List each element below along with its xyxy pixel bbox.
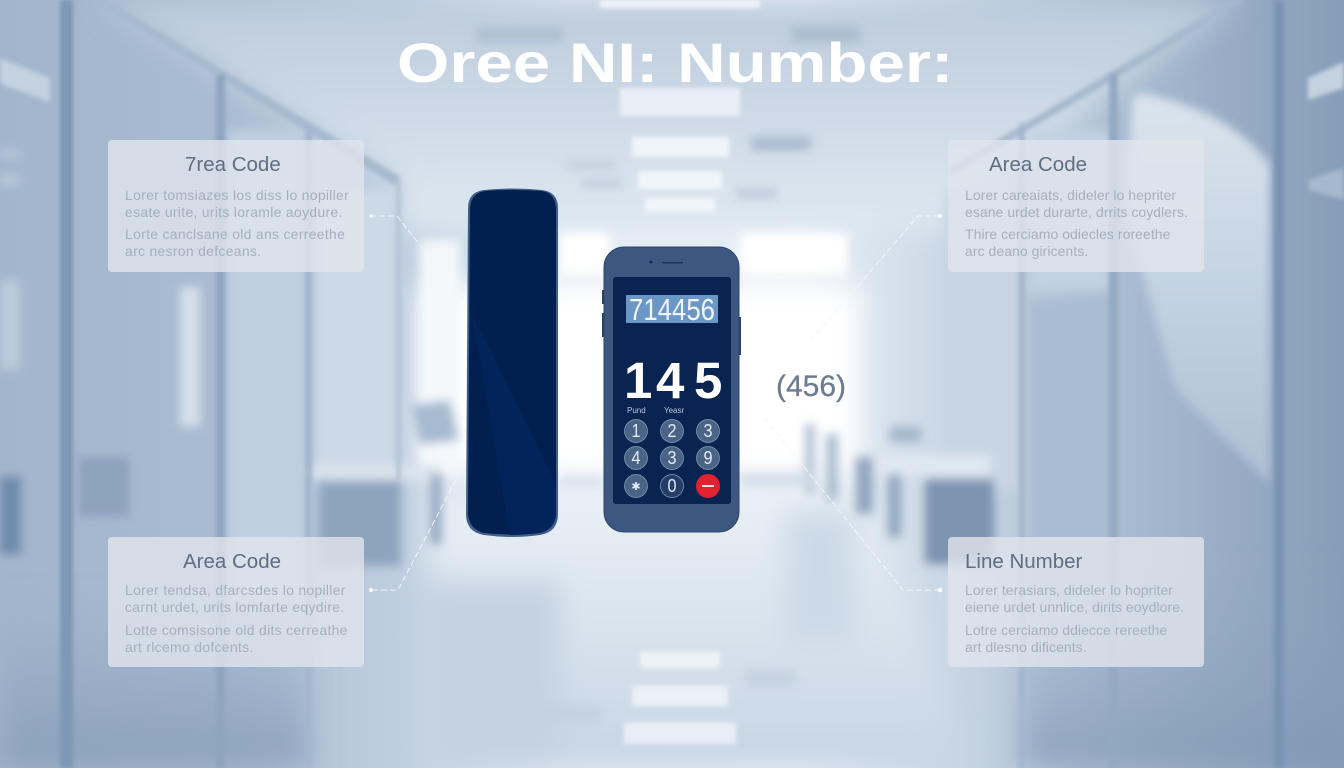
body text xyxy=(965,226,1170,259)
icon: smartphone: 9 xyxy=(704,448,712,468)
connector: bottom-right xyxy=(764,417,942,592)
icon: smartphone: 3 xyxy=(704,421,712,441)
heading: Line Number xyxy=(965,550,1082,573)
body text: esate urite, urits loramle aoydure. xyxy=(125,204,343,220)
connector: top-left xyxy=(370,214,466,303)
connector: top-right xyxy=(811,214,942,340)
body text: Lotte comsisone old dits cerreathe xyxy=(125,622,348,638)
body text: esane urdet durarte, drrits coydlers. xyxy=(965,204,1188,220)
panel: top-right area code xyxy=(948,140,1204,272)
body text xyxy=(125,582,346,615)
icon: smartphone: 5 xyxy=(694,352,722,409)
icon: smartphone: 0 xyxy=(668,476,676,496)
icon: smartphone: 714456 xyxy=(629,292,715,327)
heading: 7rea Code xyxy=(185,153,281,176)
icon: smartphone: 2 xyxy=(668,421,676,441)
icon: smartphone: Yeasr xyxy=(664,406,684,415)
heading: Area Code xyxy=(183,550,281,573)
body text: Lorer terasiars, dideler lo hopriter xyxy=(965,582,1173,598)
body text xyxy=(125,226,345,259)
body text xyxy=(965,582,1184,615)
icon: smartphone: 4 xyxy=(656,352,685,409)
body text: Lorte canclsane old ans cerreethe xyxy=(125,226,345,242)
body text: Thire cerciamo odiecles roreethe xyxy=(965,226,1170,242)
heading: Area Code xyxy=(989,153,1087,176)
title: Oree NI: Number: xyxy=(397,31,953,94)
icon: smartphone: Pund xyxy=(627,406,646,415)
icon: smartphone: ✱ xyxy=(631,481,641,493)
body text xyxy=(965,187,1188,220)
body text: carnt urdet, urits lomfarte eqydire. xyxy=(125,599,344,615)
panel: bottom-left area code xyxy=(108,537,364,667)
body text: arc deano giricents. xyxy=(965,243,1088,259)
panel: top-left area code xyxy=(108,140,364,272)
body text: Lorer tomsiazes los diss lo nopiller xyxy=(125,187,349,203)
body text xyxy=(125,622,348,655)
icon: smartphone: 4 xyxy=(632,448,640,468)
connector: bottom-left xyxy=(369,461,466,592)
icon: smartphone xyxy=(602,246,741,532)
icon: smartphone: 1 xyxy=(632,421,640,441)
body text: eiene urdet unnlice, dirits eoydlore. xyxy=(965,599,1184,615)
body text: Lotre cerciamo ddiecce rereethe xyxy=(965,622,1167,638)
body text: Lorer tendsa, dfarcsdes lo nopiller xyxy=(125,582,346,598)
icon: dark handset xyxy=(466,188,558,537)
label: (456): (456) xyxy=(776,370,846,403)
body text: arc nesron defceans. xyxy=(125,243,261,259)
body text: Lorer careaiats, dideler lo hepriter xyxy=(965,187,1176,203)
icon: smartphone: 3 xyxy=(668,448,676,468)
panel: bottom-right line number xyxy=(948,537,1204,667)
body text: art dlesno dificents. xyxy=(965,639,1087,655)
body text: art rlcemo dofcents. xyxy=(125,639,254,655)
body text xyxy=(125,187,349,220)
icon: smartphone: 1 xyxy=(624,352,652,409)
body text xyxy=(965,622,1167,655)
